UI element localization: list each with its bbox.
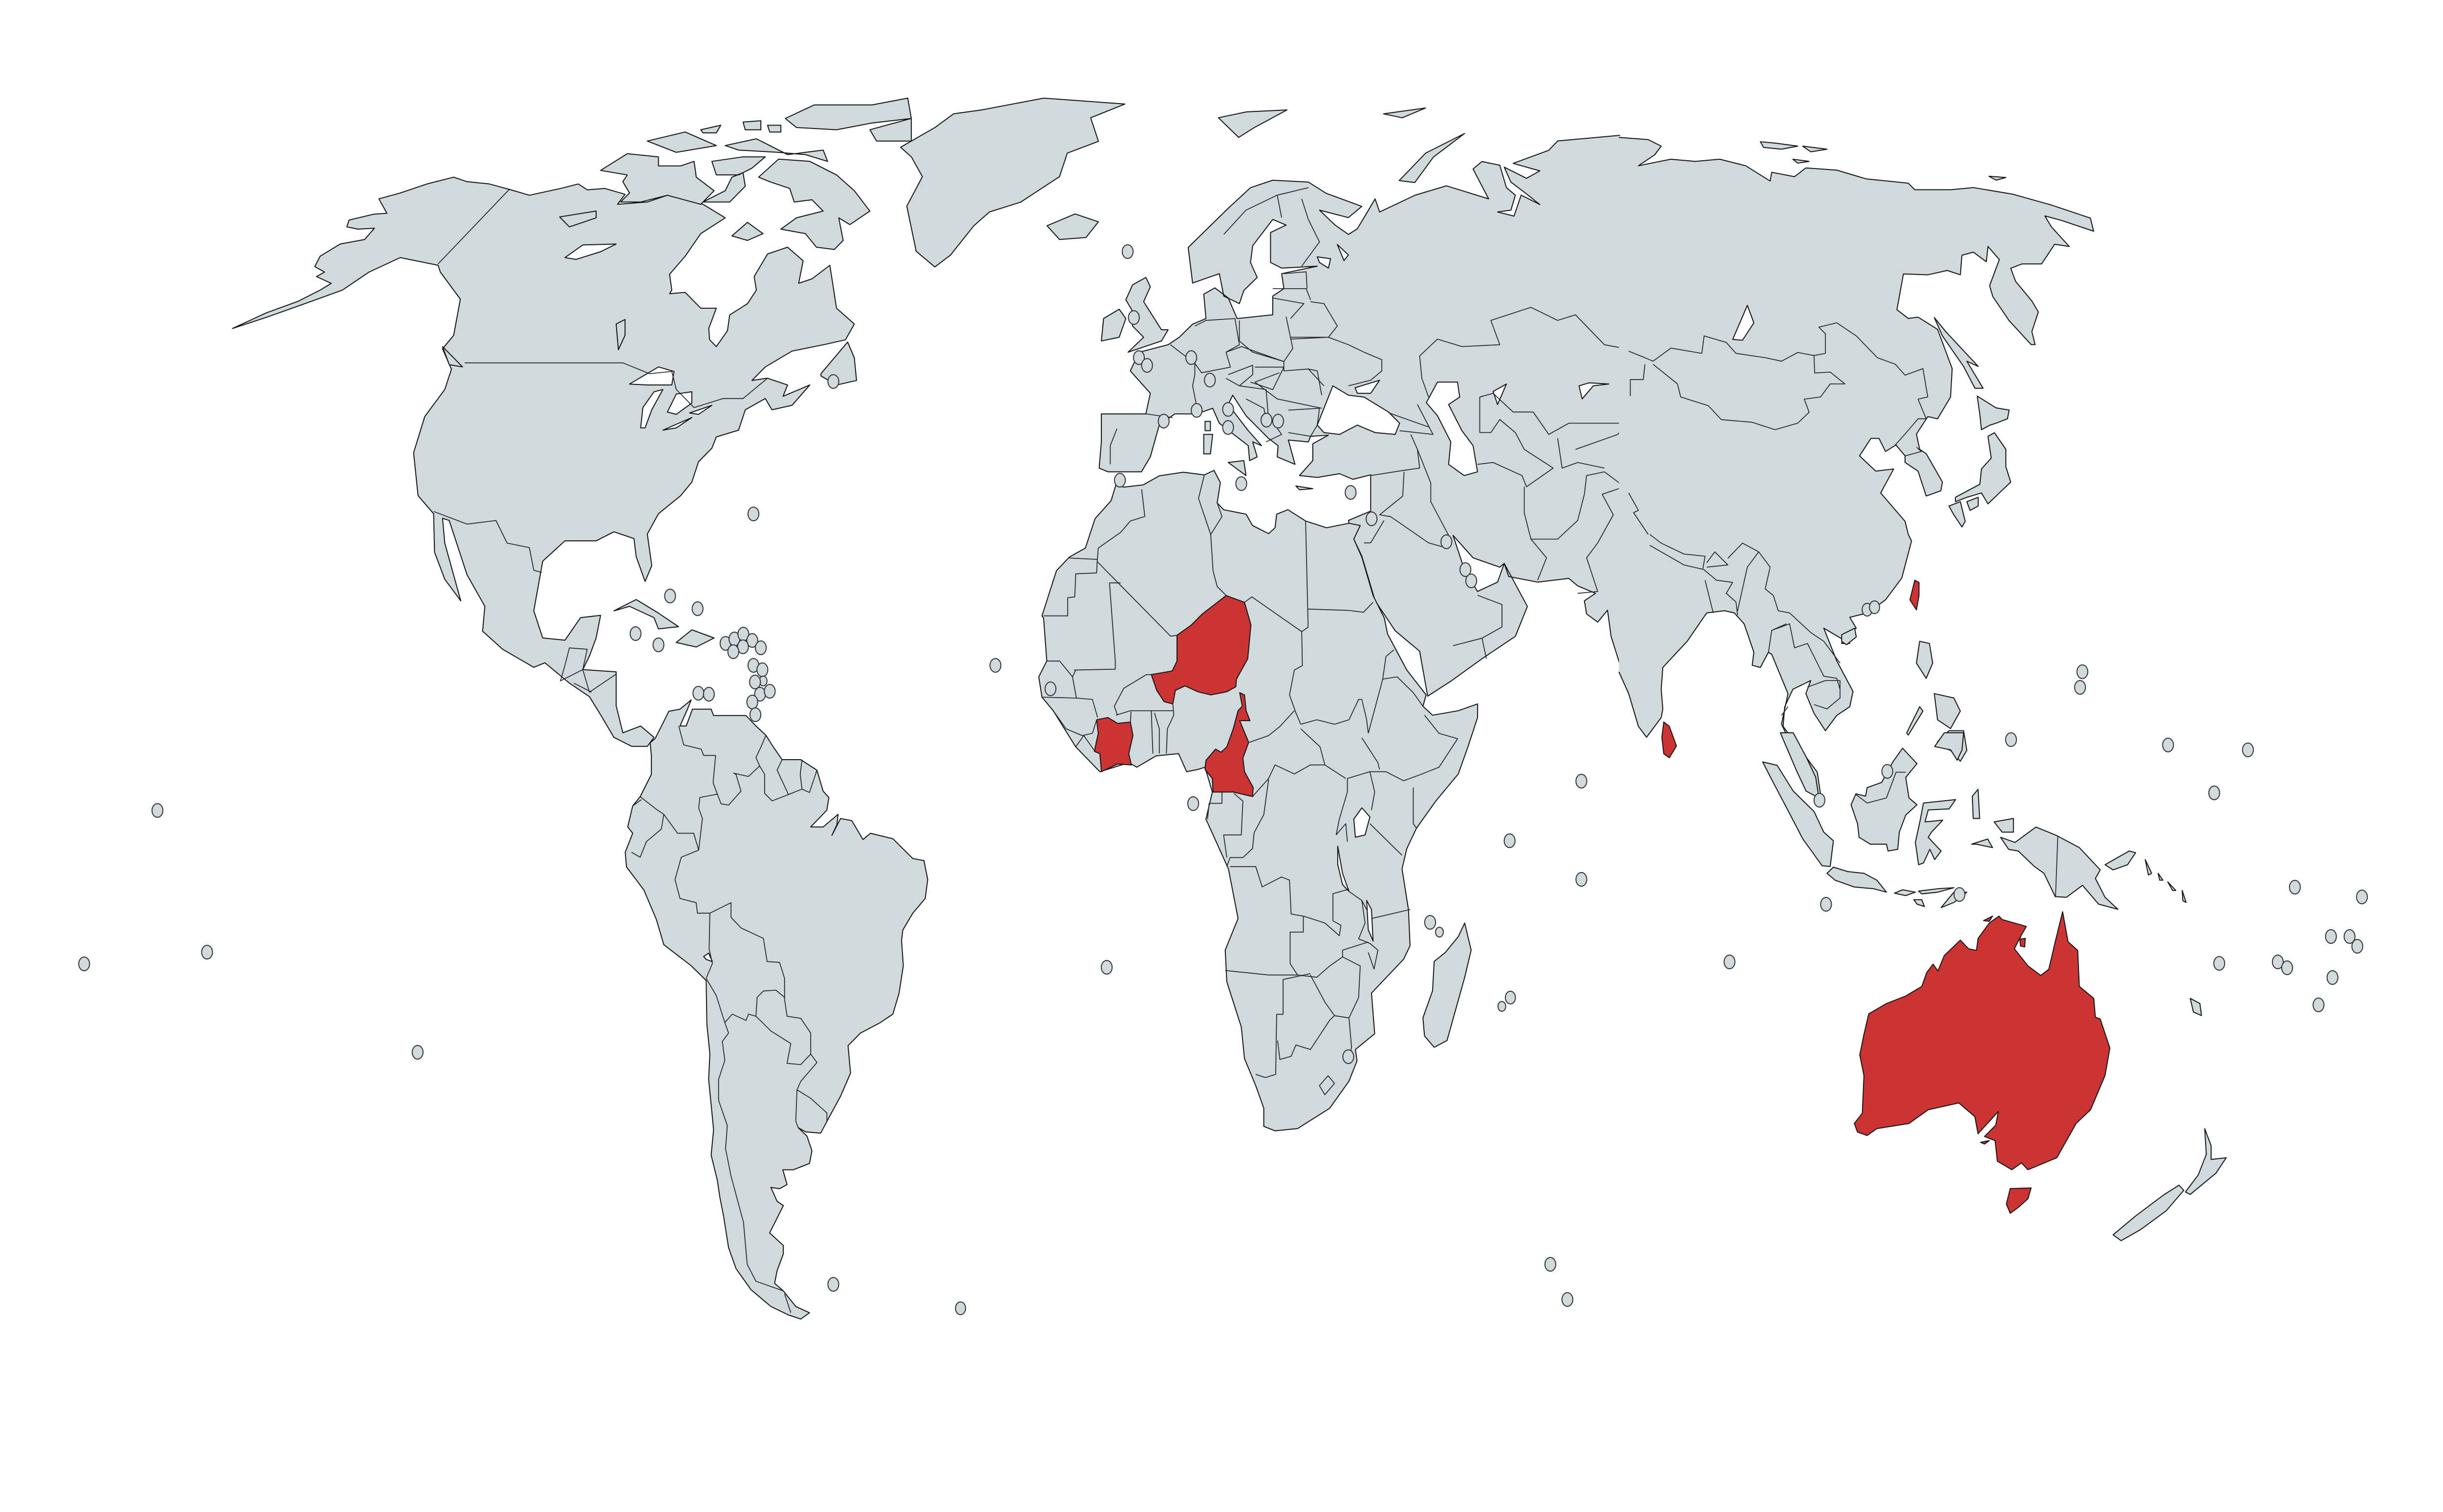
highlighted country: Niger [1151,596,1251,704]
lakes: Victoria, Tanganyika, Malawi [1338,808,1373,941]
landmass: Eurasia east [1619,137,2094,794]
landmass: New Zealand [2113,1129,2226,1241]
small territory markers [79,245,2367,1315]
landmass: Hainan [1842,628,1856,645]
landmass: Svalbard and Novaya Zemlya [1219,108,1465,183]
highlighted country: Australia [1854,912,2110,1170]
landmass: North America [233,98,911,746]
landmass: Vancouver Island [443,346,463,367]
landmass: Eurasia west [1099,135,1651,696]
landmass: Sulawesi [1915,800,1955,865]
highlighted country: Taiwan [1910,580,1919,610]
landmass: Borneo [1851,748,1917,851]
landmass: Greenland and Iceland [900,98,1465,267]
landmass: Africa [1039,470,1478,1131]
landmass: Arctic Archipelago [600,98,911,250]
highlighted country: Cameroon [1205,693,1253,797]
landmass: Arctic islands of Russia [1760,142,2006,180]
landmass: Ireland [1101,309,1126,341]
landmass: Maluku and Melanesia [1935,733,2202,1016]
landmass: Cuba [614,599,679,629]
landmass: Java and Lesser Sunda [1827,867,1967,908]
landmass: Philippines [1907,641,1967,761]
landmass: Mediterranean islands [1204,421,1313,490]
landmass: Sakhalin [1934,318,1983,388]
lakes: Great Lakes [565,244,712,430]
highlighted country: Ivory Coast [1094,718,1133,772]
landmass: Madagascar [1423,923,1471,1047]
highlighted country: Sri Lanka [1662,722,1676,758]
Oceania and Southeast Asian islands [1763,733,2226,1241]
highlighted country: Tasmania and Australian islands [1981,916,2031,1214]
landmass: Malay Peninsula [1780,733,1819,798]
landmass: South America [625,700,928,1319]
landmass: Great Britain [1126,277,1168,352]
lakes: Winnipeg and Great Bear [559,211,625,350]
landmass: New Guinea [2000,827,2118,909]
landmass: Japan [1949,396,2011,527]
landmass: Sumatra [1763,762,1833,867]
lake: Titicaca [704,953,712,961]
landmass: Hispaniola [676,630,714,647]
landmass: Newfoundland [821,342,857,385]
